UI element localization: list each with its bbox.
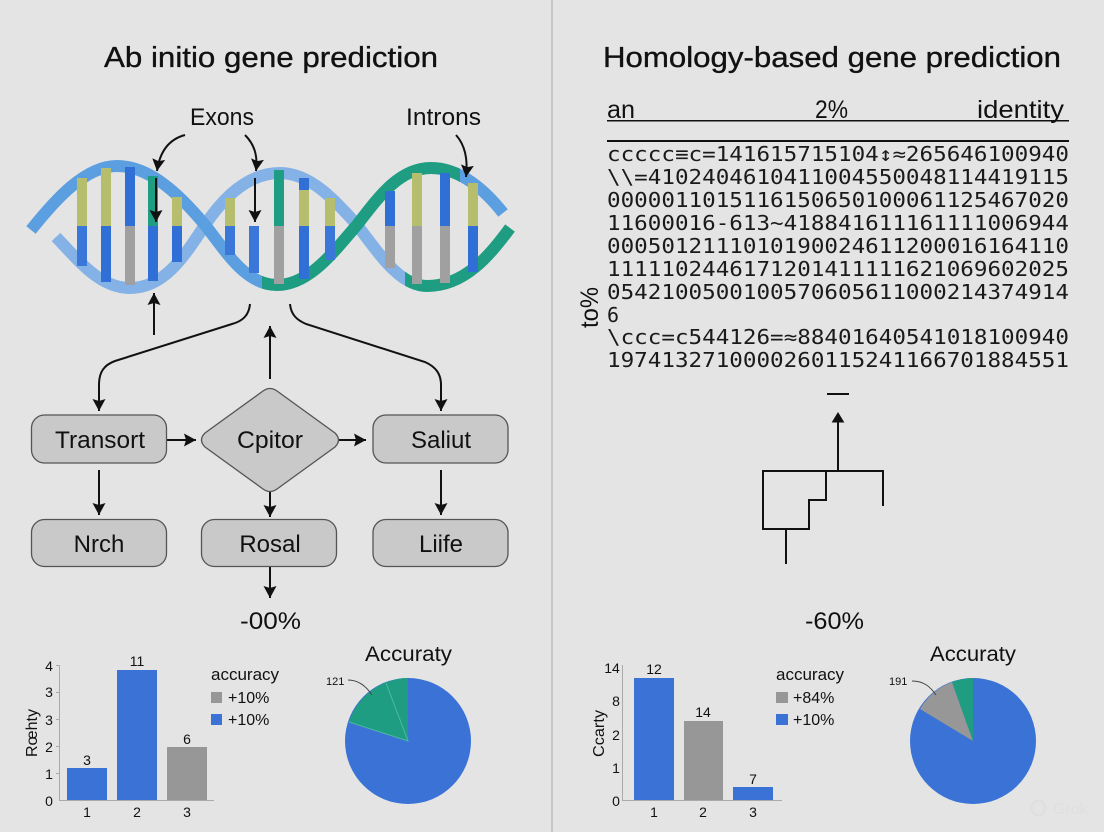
bar chart: right: 3 — [749, 804, 757, 820]
alignment number matrix: ccccc≡c=141615715104↕≈265646100940 — [607, 142, 1069, 166]
node: Liife: Liife — [419, 531, 463, 558]
legend: left: +10% — [228, 690, 269, 707]
bar chart: left: 3 — [45, 712, 53, 728]
legend: right: +84% — [793, 690, 834, 707]
alignment number matrix: 0542100500100570605611000214374914 — [607, 280, 1069, 304]
pie chart: left — [326, 643, 471, 804]
bar chart: left — [24, 653, 214, 820]
label: introns: Introns — [406, 104, 481, 131]
value: -60%: -60% — [805, 608, 864, 635]
bar chart: right: 8 — [612, 693, 620, 709]
bar chart: left: 4 — [45, 658, 53, 674]
legend: left: accuracy — [211, 665, 280, 684]
helix rungs — [77, 167, 478, 285]
alignment number matrix: \ccc=c544126=≈88401640541018100940 — [607, 325, 1069, 349]
alignment number matrix: 0005012111010190024611200016164110 — [607, 234, 1069, 258]
bar chart: right: 12 — [646, 661, 662, 677]
bar chart: right — [591, 660, 782, 820]
alignment number matrix: 6 — [607, 303, 619, 327]
legend: left: +10% — [228, 712, 269, 729]
title: homology: Homology-based gene prediction — [603, 42, 1061, 74]
node: Cpitor — [202, 388, 338, 492]
bar chart: right: 1 — [612, 760, 620, 776]
node: Transort — [32, 415, 166, 463]
bar 1 — [67, 768, 107, 800]
bar chart: right: 2 — [699, 804, 707, 820]
pie chart: left: 121 — [326, 676, 344, 688]
bar chart: left: 11 — [130, 653, 144, 669]
legend: left — [211, 665, 280, 729]
node: Transort: Transort — [55, 427, 145, 454]
arrows: exon and intron callouts — [154, 135, 467, 335]
bar chart: left: 2 — [45, 739, 53, 755]
bar chart: left: 3 — [83, 752, 91, 768]
alignment number matrix — [607, 142, 1069, 372]
legend: right: +10% — [793, 712, 834, 729]
bar chart: right: 0 — [612, 793, 620, 809]
bar chart: right: 2 — [612, 727, 620, 743]
alignment table header: an — [607, 96, 635, 124]
node: Saliut — [373, 415, 508, 463]
legend: right — [776, 665, 845, 729]
alignment table header: 2% — [815, 96, 848, 124]
bar 2 — [117, 670, 157, 800]
helix back strand — [56, 173, 510, 288]
alignment number matrix: 1111102446171201411111621069602025 — [607, 257, 1069, 281]
node: Saliut: Saliut — [411, 427, 471, 454]
bar 3 — [167, 747, 207, 800]
node: Nrch — [32, 520, 166, 566]
alignment table header — [607, 96, 1069, 142]
bar chart: right: 1 — [650, 804, 658, 820]
node: Cpitor: Cpitor — [237, 427, 303, 454]
bar chart: left: Rœhty — [24, 709, 41, 757]
bar 2 — [684, 721, 723, 800]
title: ab initio: Ab initio gene prediction — [104, 42, 438, 74]
dash mark — [827, 393, 849, 395]
helix front strand — [31, 166, 503, 285]
alignment number matrix: 0000011015116150650100061125467020 — [607, 188, 1069, 212]
watermark: Grok — [1053, 801, 1089, 818]
label: exons: Exons — [190, 104, 254, 131]
bar chart: left: 3 — [45, 684, 53, 700]
axis label: to%: to% — [576, 287, 604, 328]
bar 1 — [634, 678, 674, 800]
node: Liife — [373, 520, 508, 566]
bar chart: left: 0 — [45, 793, 53, 809]
pie chart: left: Accuraty — [365, 643, 453, 666]
DNA helix — [31, 166, 510, 288]
legend: right: accuracy — [776, 665, 845, 684]
node: Rosal: Rosal — [239, 531, 301, 558]
bar chart: right: 7 — [749, 771, 757, 787]
bar chart: left: 2 — [133, 804, 141, 820]
arrows: flow chart connectors — [99, 304, 441, 598]
value: -00%: -00% — [240, 608, 301, 635]
watermark — [1031, 801, 1089, 818]
bar chart: right: Ccarty — [591, 710, 608, 757]
bar chart: left: 3 — [183, 804, 191, 820]
bar chart: left: 1 — [45, 766, 53, 782]
alignment number matrix: 1974132710000260115241166701884551 — [607, 348, 1069, 372]
pie chart: right — [889, 643, 1036, 804]
bar 3 — [733, 787, 773, 800]
pie chart: right: 191 — [889, 676, 907, 688]
node: Rosal — [202, 520, 336, 566]
bar chart: right: 14 — [695, 704, 711, 720]
alignment number matrix: \\=4102404610411004550048114419115 — [607, 165, 1069, 189]
node: Nrch: Nrch — [74, 531, 124, 558]
alignment number matrix: 11600016-613~418841611161111006944 — [607, 211, 1069, 235]
tree diagram — [763, 413, 883, 564]
alignment table header: identity — [977, 96, 1065, 124]
pie chart: right: Accuraty — [930, 643, 1017, 666]
bar chart: left: 1 — [83, 804, 91, 820]
bar chart: left: 6 — [183, 731, 191, 747]
bar chart: right: 14 — [604, 660, 620, 676]
